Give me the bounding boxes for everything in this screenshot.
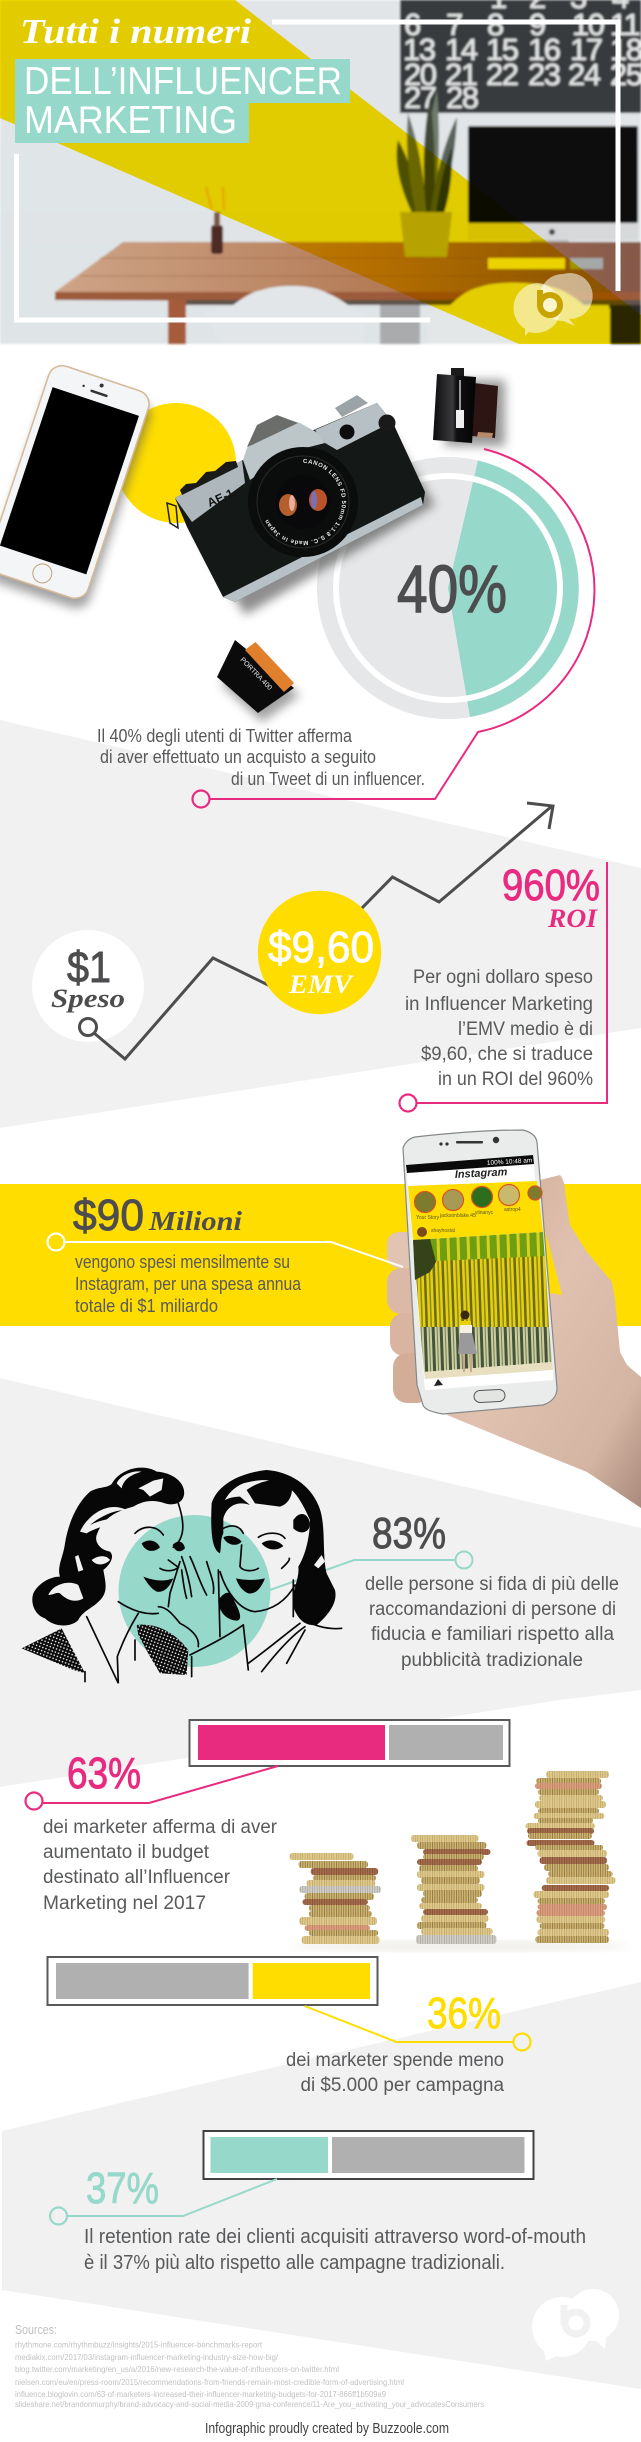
- stories strip: astrop4: [504, 1207, 521, 1213]
- phone screen: [406, 1155, 553, 1390]
- text: trust: pubblicità tradizionale: [401, 1650, 583, 1671]
- photo: desk with calendar, plant and monitor: 25: [610, 57, 641, 92]
- text: retention: [84, 2226, 586, 2274]
- text: ROI: Per ogni dollaro speso: [413, 967, 593, 988]
- stat: 37%: 37%: [86, 2164, 159, 2213]
- bar: 37%: [204, 2131, 534, 2179]
- fingers: [387, 1232, 431, 1403]
- title line 3: MARKETING: [24, 99, 237, 142]
- sources: [15, 2322, 484, 2409]
- text: trust: [365, 1574, 619, 1671]
- callout line: pink arc: [192, 449, 594, 808]
- text: instagram spend: Instagram, per una spesa annua: [75, 1274, 302, 1294]
- text: twitter: di aver effettuato un acquisto a seguito: [100, 747, 376, 767]
- panel: 40% twitter: [0, 364, 596, 809]
- photo: desk with calendar, plant and monitor: 22: [486, 57, 518, 92]
- stories strip: shayhostal: [431, 1228, 455, 1234]
- text: budget: [43, 1817, 278, 1914]
- photo: desk with calendar, plant and monitor: 15: [486, 32, 518, 67]
- right woman eyes and mouth: [223, 1536, 283, 1593]
- text: twitter: di un Tweet di un influencer.: [231, 769, 425, 789]
- text: trust: fiducia e familiari rispetto alla: [371, 1624, 614, 1645]
- logo: white speech bubbles: [532, 2289, 619, 2361]
- photo: desk with calendar, plant and monitor: 27: [404, 80, 436, 115]
- line chart arrow: [80, 803, 553, 1059]
- text: spend: dei marketer spende meno: [286, 2050, 504, 2071]
- phone body: [403, 1130, 557, 1414]
- sources: slideshare.net/brandonmurphy/brand-advocacy-and-social-media-2009-gma-conference/11-Are_you_activating_your_advocatesConsumers: [15, 2399, 484, 2409]
- coin stack tall: [526, 1771, 616, 1943]
- text: ROI: in Influencer Marketing: [405, 994, 593, 1015]
- icon: film roll bottom: [217, 640, 300, 722]
- text: instagram spend: totale di $1 miliardo: [75, 1296, 218, 1316]
- bar: 63%: [190, 1720, 510, 1766]
- right woman ear highlight: [314, 1555, 325, 1568]
- photo: desk with calendar, plant and monitor: 7: [446, 7, 462, 42]
- yellow diagonal overlay: [0, 0, 641, 344]
- label: ROI: ROI: [547, 904, 598, 933]
- panel: hero: [0, 0, 641, 344]
- text: budget: aumentato il budget: [43, 1842, 210, 1863]
- left hair highlights: [48, 1471, 163, 1601]
- sources: blog.twitter.com/marketing/en_us/a/2016/new-research-the-value-of-influencers-on-twitter.html: [15, 2364, 339, 2374]
- text: spend: [286, 2050, 504, 2096]
- text: budget: dei marketer afferma di aver: [43, 1817, 278, 1838]
- panel: budget 63%: [26, 1720, 630, 1950]
- sources: rhythmone.com/rhythmbuzz/insights/2015-influencer-benchmarks-report: [15, 2340, 263, 2350]
- text: instagram spend: vengono spesi mensilmente su: [75, 1252, 290, 1272]
- photo: desk with calendar, plant and monitor: 20: [404, 57, 437, 92]
- text: ROI: in un ROI del 960%: [438, 1069, 593, 1090]
- coin stack small: [290, 1853, 381, 1944]
- stat: 63%: 63%: [67, 1749, 141, 1798]
- yellow circle: [116, 403, 236, 523]
- stat: $90: $90: [73, 1191, 144, 1240]
- panel: 37%: [50, 2131, 586, 2274]
- photo: desk with calendar, plant and monitor: 14: [445, 32, 478, 67]
- photo: desk with calendar, plant and monitor: 6: [404, 7, 420, 42]
- left woman face and arm lines: [85, 1503, 243, 1683]
- bottom nav: [425, 1370, 553, 1390]
- panel: 36%: [48, 1957, 530, 2096]
- text: ROI: $9,60, che si traduce: [421, 1044, 593, 1065]
- donut chart: 40%: [317, 457, 579, 719]
- background band 3: [2, 1982, 641, 2389]
- home button: [474, 1389, 505, 1403]
- right woman hair fill: [213, 1480, 310, 1621]
- icon: camera: [166, 395, 440, 620]
- text: twitter: Il 40% degli utenti di Twitter afferma: [97, 726, 353, 746]
- sources: mediakix.com/2017/03/instagram-influencer-marketing-industry-size-how-big/: [15, 2352, 279, 2362]
- photo: desk with calendar, plant and monitor: 9: [529, 7, 545, 42]
- footer credit: Infographic proudly created by Buzzoole.com: [205, 2420, 449, 2437]
- photo: desk with calendar, plant and monitor: 18: [610, 32, 641, 67]
- photo: desk with calendar, plant and monitor: 24: [568, 57, 601, 92]
- status bar: [406, 1155, 534, 1173]
- feed photo: cactus wall: [413, 1232, 553, 1380]
- stories strip: jacksonblake.45: [439, 1213, 476, 1219]
- right woman hair: [211, 1470, 336, 1625]
- photo: desk with calendar, plant and monitor: 21: [445, 57, 477, 92]
- icon: smartphone: [0, 362, 157, 612]
- sources: influence.bloglovin.com/63-of-marketers-increased-their-influencer-marketing-budgets-for-2017-866ff1b509a9: [15, 2389, 386, 2399]
- stat: $9,60: $9,60: [268, 923, 374, 972]
- callout line: teal: [270, 1552, 472, 1590]
- stat: 36%: 36%: [427, 1989, 501, 2038]
- bar: 36%: [48, 1957, 378, 2005]
- panel: word of mouth 83%: [22, 1468, 619, 1683]
- left woman hair: [32, 1468, 184, 1625]
- photo: desk with calendar, plant and monitor: 17: [570, 32, 602, 67]
- callout line: white: [48, 1234, 403, 1267]
- sources: Sources:: [15, 2322, 57, 2337]
- logo: speech bubbles: [513, 273, 593, 336]
- photo: desk with calendar, plant and monitor: 10: [572, 7, 605, 42]
- label: Milioni: Milioni: [148, 1206, 243, 1236]
- background band 1: [0, 720, 641, 1128]
- callout line: pink: [400, 862, 607, 1112]
- photo: desk with calendar, plant and monitor: 13: [403, 32, 435, 67]
- panel: ROI chart: [32, 803, 607, 1112]
- text: budget: Marketing nel 2017: [43, 1893, 206, 1914]
- stories strip: Your Story: [416, 1215, 440, 1221]
- text: trust: delle persone si fida di più delle: [365, 1574, 619, 1595]
- stat: 40%: 40%: [397, 552, 507, 627]
- text: ROI: l’EMV medio è di: [458, 1019, 593, 1040]
- coin stack medium: [411, 1835, 496, 1944]
- text: spend: di $5.000 per campagna: [300, 2075, 504, 2096]
- white frame: [16, 22, 618, 320]
- yellow circle: [258, 891, 381, 1014]
- photo: desk with calendar, plant and monitor: 8: [487, 7, 503, 42]
- photo: desk with calendar, plant and monitor: 16: [528, 32, 560, 67]
- stories strip: [408, 1181, 543, 1240]
- text: trust: raccomandazioni di persone di: [369, 1599, 616, 1620]
- illustration: two women whispering: [22, 1468, 342, 1683]
- left woman eyes and mouth: [142, 1540, 185, 1592]
- photo: desk with calendar, plant and monitor: 11: [610, 7, 639, 42]
- phone speaker: [439, 1137, 499, 1146]
- callout line: yellow: [305, 2006, 530, 2050]
- icon: film roll bottom: PORTRA 400: [239, 657, 273, 692]
- left woman polka collars: [22, 1625, 188, 1675]
- icon: film roll top: [433, 368, 505, 446]
- panel: instagram: [0, 1130, 641, 1508]
- callout line: teal: [50, 2179, 277, 2224]
- yellow band: [0, 1184, 641, 1326]
- stories strip: yiinanyc: [475, 1210, 494, 1216]
- status bar: 100% 10:48 am: [487, 1157, 533, 1167]
- teal circle: [118, 1515, 270, 1667]
- right woman face and collar lines: [220, 1526, 342, 1672]
- text: twitter: [97, 726, 425, 789]
- title line 2: DELL’INFLUENCER: [24, 60, 342, 103]
- text: ROI: [405, 967, 593, 1090]
- hand holding phone: [387, 1130, 641, 1508]
- text: retention: Il retention rate dei clienti acquisiti attraverso word-of-mouth: [84, 2226, 586, 2248]
- white circle: [32, 930, 144, 1042]
- title highlight blocks: [15, 59, 350, 143]
- callout line: pink: [26, 1766, 278, 1810]
- hand palm: [447, 1175, 641, 1508]
- stat: $1: $1: [67, 943, 111, 992]
- instagram header: Instagram: [455, 1166, 508, 1181]
- text: instagram spend: [75, 1252, 302, 1316]
- photo: desk with calendar, plant and monitor: 28: [446, 80, 478, 115]
- icon: camera: AE-1: [205, 486, 236, 510]
- stat: 960%: 960%: [502, 861, 600, 910]
- text: budget: destinato all’Influencer: [43, 1867, 231, 1888]
- label: EMV: EMV: [288, 970, 355, 999]
- text: retention: è il 37% più alto rispetto alle campagne tradizionali.: [84, 2252, 505, 2274]
- stat: 83%: 83%: [372, 1509, 446, 1558]
- background band 2: [0, 1378, 641, 1787]
- label: Speso: Speso: [51, 984, 125, 1013]
- title line 1: Tutti i numeri: [20, 12, 251, 51]
- icon: camera: CANON LENS FD 50mm 1:1.8 S.C. Made in Japan: [266, 458, 346, 546]
- coin stacks: [290, 1771, 630, 1950]
- photo: desk with calendar, plant and monitor: 23: [528, 57, 560, 92]
- sources: nielsen.com/eu/en/press-room/2015/recommendations-from-friends-remain-most-credible-form-of-advertising.html: [15, 2377, 404, 2387]
- photo: desk with calendar, plant and monitor: [0, 0, 641, 344]
